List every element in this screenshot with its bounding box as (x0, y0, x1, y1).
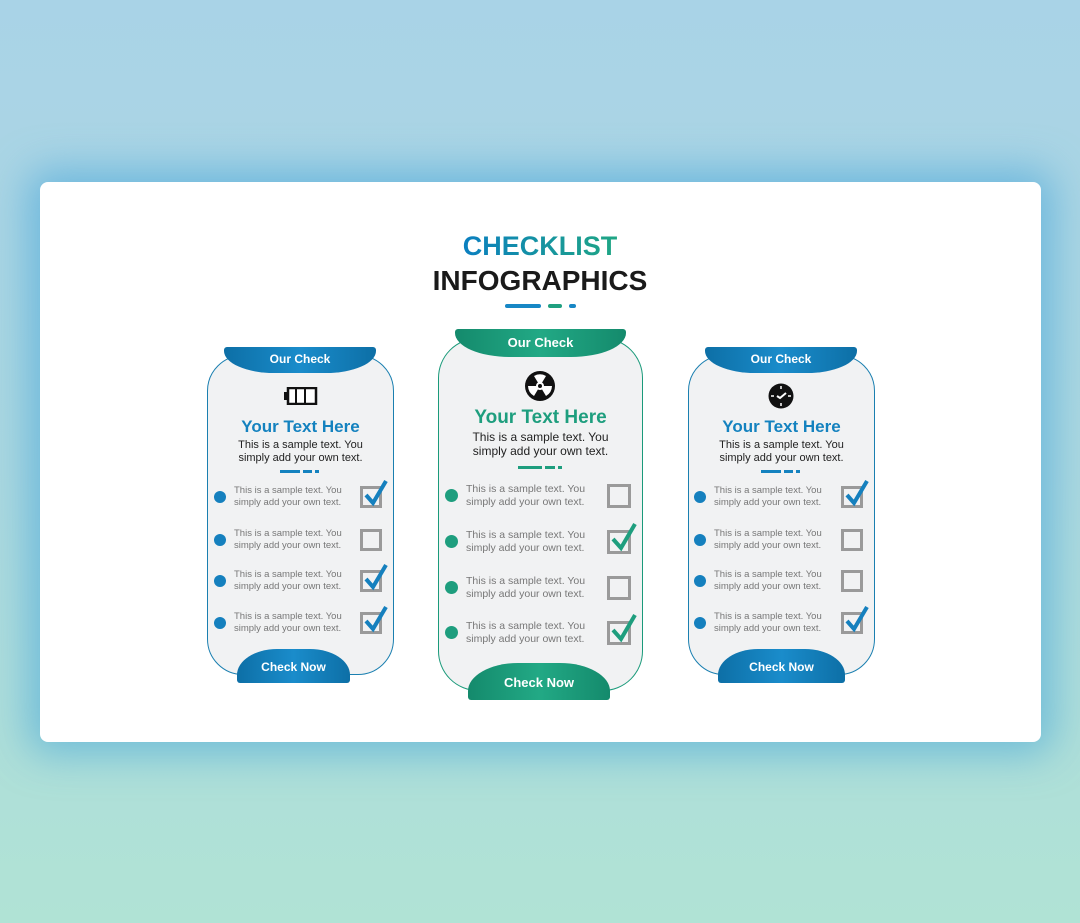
dashes (280, 470, 319, 473)
title dashes (505, 304, 576, 308)
checklist items: simply add your own text. (234, 540, 341, 551)
description: simply add your own text. (719, 452, 844, 464)
checklist items: simply add your own text. (466, 542, 584, 554)
checklist items: simply add your own text. (234, 581, 341, 592)
heading: Your Text Here (241, 417, 360, 436)
top tab: Our Check (270, 352, 330, 366)
icon: radiation (525, 371, 555, 401)
checklist items: This is a sample text. You (234, 611, 342, 622)
checklist items: This is a sample text. You (466, 529, 585, 541)
bottom tab (468, 663, 610, 700)
bottom tab: Check Now (261, 660, 326, 674)
heading: Your Text Here (474, 407, 607, 428)
icon: battery (284, 387, 318, 405)
icon: clock (768, 384, 794, 408)
dashes (518, 466, 562, 469)
dashes (761, 470, 800, 473)
checklist items: simply add your own text. (466, 496, 584, 508)
checklist items: This is a sample text. You (234, 485, 342, 496)
title: INFOGRAPHICS (433, 265, 647, 296)
description: This is a sample text. You (719, 439, 844, 451)
checklist items (214, 480, 388, 634)
checklist items: simply add your own text. (234, 623, 341, 634)
panel: left card (207, 347, 394, 683)
panel: right card (688, 347, 875, 683)
checklist items: simply add your own text. (466, 588, 584, 600)
top tab (224, 347, 376, 373)
description: This is a sample text. You (238, 439, 363, 451)
slide panel (40, 182, 1041, 742)
description: simply add your own text. (238, 452, 363, 464)
bottom tab (718, 649, 845, 683)
checklist items: This is a sample text. You (234, 569, 342, 580)
checklist items: simply add your own text. (714, 540, 821, 551)
checklist items (694, 480, 869, 634)
checklist items: This is a sample text. You (466, 620, 585, 632)
checklist items: simply add your own text. (714, 497, 821, 508)
title (433, 231, 647, 296)
checklist items: simply add your own text. (714, 623, 821, 634)
checklist items: This is a sample text. You (714, 485, 822, 496)
description (472, 430, 609, 458)
checklist items: simply add your own text. (714, 581, 821, 592)
checklist items (445, 483, 637, 645)
panel: center card (438, 329, 643, 700)
checklist items: This is a sample text. You (466, 575, 585, 587)
top tab (705, 347, 857, 373)
checklist items: This is a sample text. You (714, 528, 822, 539)
checklist items: simply add your own text. (466, 632, 584, 644)
checklist items: This is a sample text. You (714, 611, 822, 622)
checklist items: simply add your own text. (234, 497, 341, 508)
bottom tab (237, 649, 350, 683)
top tab: Our Check (508, 335, 573, 350)
description (719, 439, 844, 464)
title: CHECKLIST (463, 231, 617, 261)
heading: Your Text Here (722, 417, 841, 436)
description: This is a sample text. You (472, 430, 609, 444)
description: simply add your own text. (473, 444, 608, 458)
checklist items: This is a sample text. You (234, 528, 342, 539)
bottom tab: Check Now (749, 660, 814, 674)
checklist items: This is a sample text. You (714, 569, 822, 580)
description (238, 439, 363, 464)
top tab (455, 329, 626, 357)
checklist items: This is a sample text. You (466, 483, 585, 495)
top tab: Our Check (751, 352, 811, 366)
bottom tab: Check Now (504, 675, 574, 690)
